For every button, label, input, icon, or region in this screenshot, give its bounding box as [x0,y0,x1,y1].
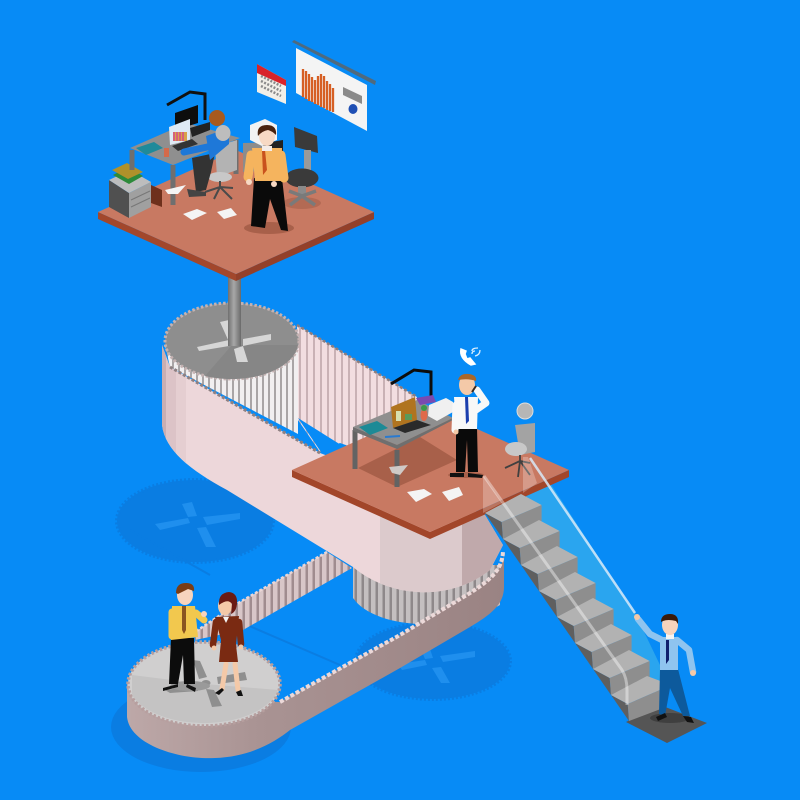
papers on upper platform [165,185,237,220]
filing cabinet [109,163,151,218]
shadow under lower gear [111,682,291,772]
lower back belt with teeth [195,552,352,640]
chart bars [303,69,333,112]
desk top [353,400,453,445]
front belt and hub [160,340,507,610]
papers on lower platform [407,487,463,502]
legs [192,153,215,192]
head [209,110,225,126]
belt top edge teeth [170,367,320,453]
desk with computer [130,92,240,205]
seated worker [184,110,237,199]
desk lamp [167,92,205,120]
glass panel behind stairs [520,460,660,700]
printer cabinet [243,119,283,172]
lower gear disc [128,642,280,726]
torso and arm [184,146,212,152]
office chair [215,140,237,177]
upper back belt with teeth [297,325,417,470]
belt shadow lines [130,530,340,665]
desk lamp [391,370,431,397]
monitor [175,105,198,130]
paper under desk [389,465,408,475]
plant and cup [164,148,169,157]
books [113,167,143,184]
desk legs [355,430,397,487]
desk legs [132,140,236,205]
staircase [485,494,671,721]
upper platform [98,150,374,281]
gear shadow: right [356,623,510,699]
lower platform [292,408,569,539]
stair floor [626,705,707,743]
lower belt rim teeth [280,550,503,702]
desk with laptop [353,370,453,487]
blue gap in belt [298,418,341,452]
lower-middle gear teeth [353,565,500,624]
man at stair bottom [634,614,696,723]
wooden drawer [151,185,162,207]
office chair on lower platform [505,403,535,477]
icon: phone with signal [461,348,480,365]
rolling chair [283,127,321,209]
book on desk [136,142,163,155]
desk top [130,123,240,165]
upper gear disc [165,303,299,379]
board: bar chart [292,40,376,131]
stair steps [485,494,671,721]
plant [420,409,428,421]
upper gear teeth band [165,345,298,434]
shaft [228,276,241,346]
glass railings [483,457,635,705]
man in yellow shirt [163,583,210,692]
purple folder [416,395,436,405]
laptop [169,119,198,151]
woman in brown dress [212,592,244,696]
pen [385,436,400,437]
laptop [391,397,431,433]
book [359,421,388,435]
lower belt outer side [127,553,504,758]
printer [428,398,453,421]
calendar [257,64,286,104]
gear shadow: left [117,480,273,562]
man in orange shirt [244,125,294,234]
man on the phone [448,374,486,478]
gear cross spokes [165,660,247,707]
gear cross spokes [197,320,271,362]
